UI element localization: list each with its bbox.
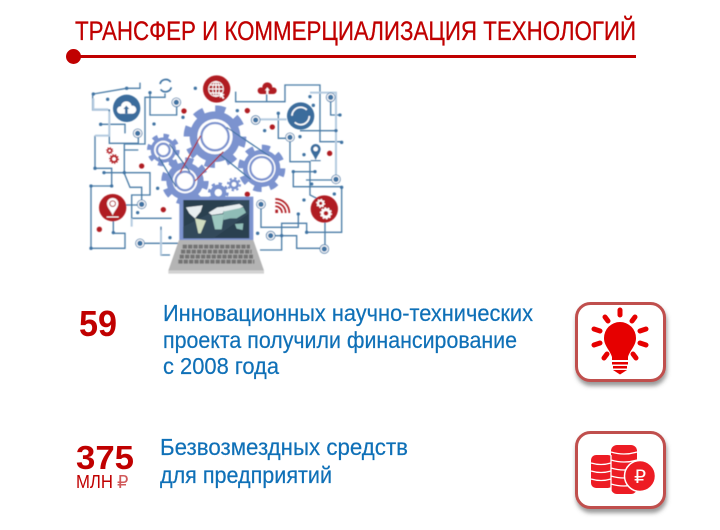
- icon: wifi signal: [275, 199, 289, 213]
- illustration: technology network with gears and laptop: [89, 75, 343, 274]
- icon: map pin: [99, 194, 126, 221]
- text block: grants: для предприятий: [160, 462, 332, 488]
- stat: 375 million rubles: 375: [76, 439, 134, 476]
- text block: innovation projects: проекта получили финансирование: [163, 327, 517, 353]
- stat: 375 million rubles: [76, 439, 134, 492]
- stat: 375 million rubles: ₽: [117, 472, 128, 492]
- text block: grants: [160, 434, 408, 488]
- icon: red cloud: [258, 82, 277, 94]
- text block: innovation projects: [163, 300, 533, 379]
- text block: innovation projects: Инновационных научно-технических: [163, 300, 533, 326]
- gears: [149, 109, 282, 202]
- icon: globe: [203, 75, 230, 103]
- title underline with dot: [66, 49, 636, 64]
- stat: 59: 59: [79, 303, 117, 344]
- icon: small red gears: [107, 148, 118, 163]
- card: light bulb icon: [576, 304, 664, 380]
- laptop: [168, 197, 264, 274]
- icon: cloud upload: [113, 95, 140, 122]
- stat: 375 million rubles: МЛН: [76, 472, 113, 492]
- icon: light bulb: [594, 310, 646, 374]
- text block: grants: Безвозмездных средств: [160, 434, 408, 460]
- text block: innovation projects: с 2008 года: [163, 353, 279, 379]
- icon: sync outline: [160, 80, 171, 92]
- icon: settings gears: [311, 195, 338, 223]
- icon: sync: [287, 102, 314, 130]
- card: coins icon: [576, 432, 664, 508]
- icon: small pin: [311, 144, 321, 161]
- icon: coin stacks with ruble: ₽: [634, 467, 646, 488]
